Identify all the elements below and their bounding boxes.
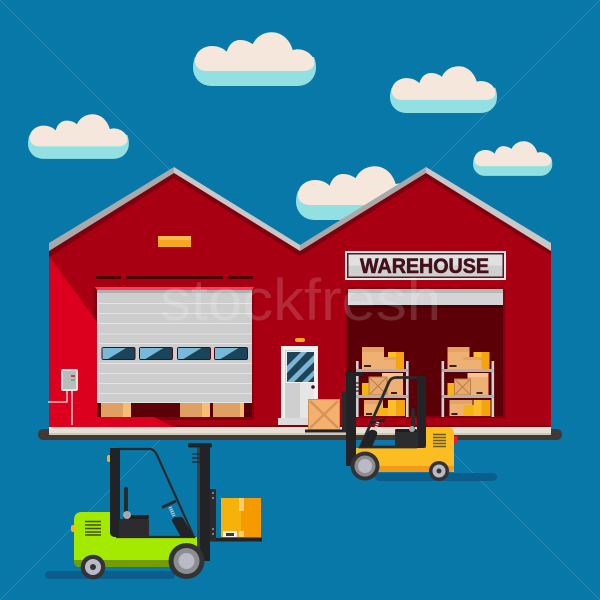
fork [305,430,346,432]
mast [188,443,214,561]
front wheel [350,452,380,480]
front wheel [168,543,204,579]
cloud: top right [390,66,497,113]
small door [278,346,319,425]
shelf rack: left [356,347,409,417]
fork [210,538,262,542]
electric box [48,369,78,425]
cab frame [360,378,424,447]
mast [345,372,363,466]
door canopy [95,287,254,290]
seat [395,408,418,448]
roller shutter door [97,289,252,403]
steering spring [375,422,378,430]
grille [85,522,101,535]
cargo box [221,498,261,537]
dashboard [359,430,377,447]
shelf rack: right [442,347,494,417]
wall [49,170,551,427]
cloud: top centre [193,32,316,86]
roller door rolled up [348,289,503,308]
dark slats above door [96,276,253,279]
open bay interior [348,289,503,416]
wooden crate [308,399,340,430]
body underside [356,466,454,472]
warehouse building [38,167,562,440]
open bay recess [346,287,505,418]
carriage [342,392,347,432]
carriage [210,489,216,541]
roof underside shadow [49,173,551,257]
loading door recess [94,288,254,420]
watermark: stockfresh [160,268,441,333]
door windows [102,347,248,360]
cloud: behind roof [296,166,419,220]
cloud: left [28,114,129,159]
steering spring [170,507,174,516]
steering [370,420,385,423]
forklift: yellow [305,372,497,481]
tail light [454,436,458,443]
rear post [110,448,120,537]
rear wheel [81,555,105,579]
roof trim [49,167,551,251]
pallets [101,403,244,417]
forklift shadow [375,473,497,481]
body underside [74,560,197,567]
ground base [38,429,562,440]
cloud: far right [473,141,552,176]
sign: WAREHOUSE [345,251,506,280]
door light [295,338,305,342]
steering [162,501,176,508]
body [356,427,454,472]
dashboard [172,517,194,537]
body [74,512,197,567]
lights [71,455,111,532]
seat [119,487,149,537]
door interior [97,403,252,417]
wall base strip [173,425,551,427]
rear wheel [429,461,449,481]
sign: WAREHOUSE: WAREHOUSE [360,255,489,278]
grille [433,434,446,446]
cab frame [116,449,194,537]
vent [158,236,191,247]
forklift: green [45,443,262,579]
rear post [417,376,426,448]
lit wall section [49,256,173,427]
forklift shadow [45,571,175,579]
floor strip [49,427,551,435]
